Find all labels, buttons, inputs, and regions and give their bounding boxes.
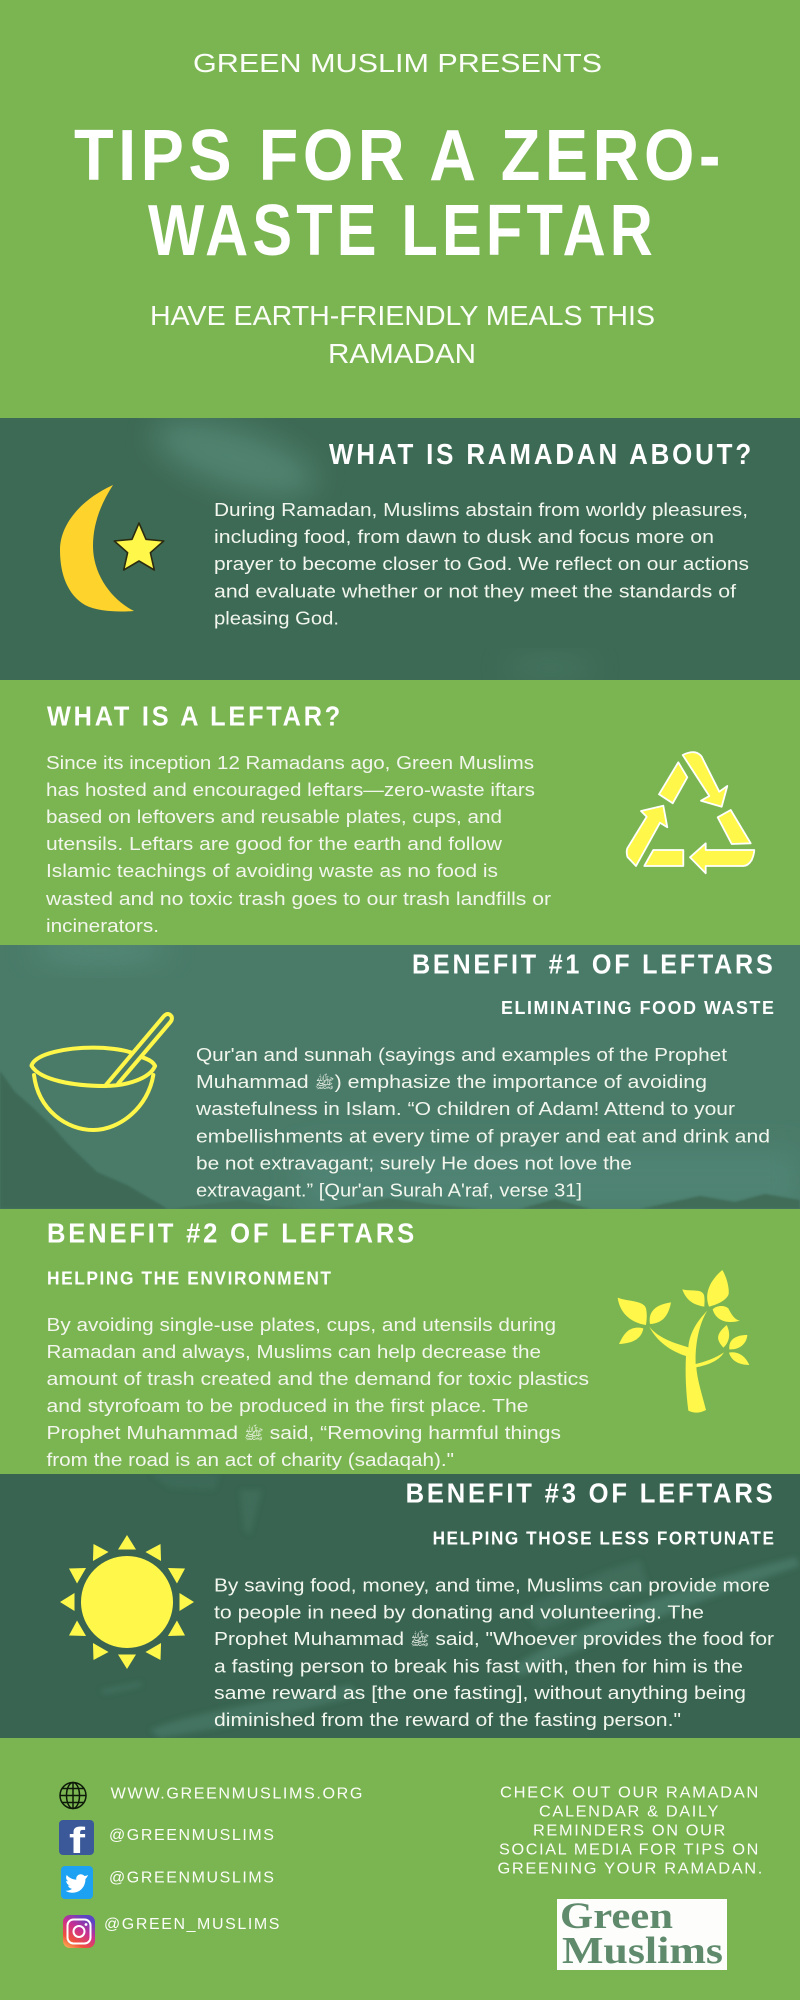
subtitle <box>150 300 655 369</box>
body text: During Ramadan, Muslims abstain from worldy pleasures, <box>214 500 748 520</box>
body text: including food, from dawn to dusk and focus more on <box>214 527 714 547</box>
heading: BENEFIT #3 OF LEFTARS <box>406 1478 776 1509</box>
body text: Islamic teachings of avoiding waste as no food is <box>46 861 498 881</box>
body text: based on leftovers and reusable plates, cups, and <box>46 807 502 827</box>
body text: Since its inception 12 Ramadans ago, Green Muslims <box>46 753 534 773</box>
subheading: ELIMINATING FOOD WASTE <box>501 997 776 1018</box>
body text: embellishments at every time of prayer and eat and drink and <box>196 1126 770 1146</box>
icon: tree <box>618 1270 749 1413</box>
panel: benefit 3 <box>0 1474 800 1738</box>
body text: prayer to become closer to God. We reflect on our actions <box>214 554 749 574</box>
body text: has hosted and encouraged leftars—zero-waste iftars <box>46 780 535 800</box>
icon: crescent moon and star <box>60 485 164 611</box>
call to action text: CALENDAR & DAILY <box>539 1803 720 1820</box>
logo: Green Muslims: Green <box>560 1896 673 1937</box>
panel: benefit 2 <box>0 1209 800 1474</box>
title <box>74 116 725 271</box>
heading: BENEFIT #2 OF LEFTARS <box>47 1218 417 1249</box>
body text: incinerators. <box>46 916 159 936</box>
icon: sun <box>60 1535 194 1669</box>
subtitle: RAMADAN <box>328 338 476 369</box>
body text: from the road is an act of charity (sadaqah)." <box>46 1450 454 1470</box>
body text: utensils. Leftars are good for the earth and follow <box>46 834 503 854</box>
heading: WHAT IS A LEFTAR? <box>47 700 343 732</box>
twitter handle: @GREENMUSLIMS <box>109 1869 276 1886</box>
body text: and styrofoam to be produced in the first place. The <box>46 1396 528 1416</box>
body text: Qur'an and sunnah (sayings and examples of the Prophet <box>196 1045 727 1065</box>
body text: be not extravagant; surely He does not love the <box>196 1154 632 1174</box>
body text: Prophet Muhammad ﷺ said, "Whoever provides the food for <box>214 1629 774 1649</box>
subtitle: HAVE EARTH-FRIENDLY MEALS THIS <box>150 300 655 331</box>
body text: By avoiding single-use plates, cups, and utensils during <box>46 1315 556 1335</box>
call to action text: GREENING YOUR RAMADAN. <box>498 1860 764 1877</box>
presenter line: GREEN MUSLIM PRESENTS <box>193 48 602 78</box>
body text <box>45 753 551 936</box>
icon: bowl and spoon <box>32 1014 172 1130</box>
logo: Green Muslims: Muslims <box>562 1930 723 1972</box>
body text: wastefulness in Islam. “O children of Adam! Attend to your <box>195 1099 735 1119</box>
icon: instagram <box>63 1915 95 1948</box>
subheading: HELPING THOSE LESS FORTUNATE <box>433 1527 776 1548</box>
facebook handle: @GREENMUSLIMS <box>109 1827 276 1844</box>
body text: extravagant.” [Qur'an Surah A'raf, verse 31] <box>196 1180 582 1200</box>
body text: pleasing God. <box>214 608 339 628</box>
icon: twitter <box>61 1866 93 1899</box>
title: TIPS FOR A ZERO- <box>74 116 725 196</box>
title: WASTE LEFTAR <box>148 191 657 271</box>
body text: diminished from the reward of the fasting person." <box>214 1710 681 1730</box>
call to action text <box>498 1784 764 1877</box>
panel: what is a leftar <box>0 680 800 945</box>
icon: globe <box>60 1782 86 1808</box>
body text <box>46 1315 589 1470</box>
body text <box>214 500 749 628</box>
call to action text: CHECK OUT OUR RAMADAN <box>500 1784 760 1801</box>
instagram handle: @GREEN_MUSLIMS <box>104 1916 281 1933</box>
icon: facebook: f <box>69 1820 86 1861</box>
body text: amount of trash created and the demand for toxic plastics <box>46 1369 589 1389</box>
body text: Muhammad ﷺ) emphasize the importance of avoiding <box>196 1072 707 1092</box>
body text: Prophet Muhammad ﷺ said, “Removing harmful things <box>46 1423 561 1443</box>
body text: same reward as [the one fasting], without anything being <box>214 1683 746 1703</box>
subheading: HELPING THE ENVIRONMENT <box>47 1267 333 1288</box>
panel: benefit 1 <box>0 936 800 1210</box>
heading: WHAT IS RAMADAN ABOUT? <box>329 439 754 471</box>
call to action text: SOCIAL MEDIA FOR TIPS ON <box>499 1841 760 1858</box>
body text <box>214 1576 774 1730</box>
body text: a fasting person to break his fast with, then for him is the <box>214 1656 743 1676</box>
body text: Ramadan and always, Muslims can help decrease the <box>46 1342 541 1362</box>
panel: header <box>0 0 800 418</box>
body text: and evaluate whether or not they meet the standards of <box>214 582 737 602</box>
call to action text: REMINDERS ON OUR <box>533 1822 727 1839</box>
panel: what is Ramadan about <box>0 403 800 680</box>
icon: recycle <box>627 752 754 873</box>
body text <box>195 1045 770 1200</box>
body text: By saving food, money, and time, Muslims can provide more <box>214 1576 770 1596</box>
logo: Green Muslims <box>557 1896 727 1972</box>
body text: to people in need by donating and volunteering. The <box>214 1602 704 1622</box>
panel: footer <box>0 1738 800 2000</box>
icon: facebook <box>59 1820 94 1861</box>
website link: WWW.GREENMUSLIMS.ORG <box>111 1785 364 1802</box>
body text: wasted and no toxic trash goes to our trash landfills or <box>45 889 551 909</box>
